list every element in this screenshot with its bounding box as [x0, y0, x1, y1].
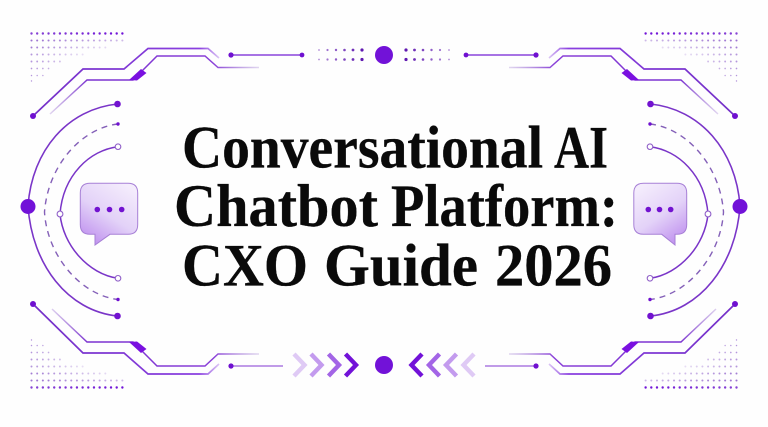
- concentric arcs: right: [647, 101, 748, 319]
- concentric arcs: left: [20, 101, 121, 319]
- icon: chat bubble left: [80, 183, 138, 245]
- title line 2: Chatbot: [174, 173, 378, 239]
- circuit traces: top left: [30, 48, 259, 119]
- dot matrix: bottom right: [644, 340, 736, 388]
- bottom centre connector with chevrons: [228, 354, 539, 376]
- circuit traces: bottom right: [509, 301, 738, 374]
- title line 1: Conversational: [182, 114, 543, 180]
- title line 3: 2026: [495, 232, 612, 298]
- title line 2: Platform:: [391, 173, 618, 239]
- top centre connector: [228, 46, 539, 64]
- title line 3: Guide: [324, 232, 478, 298]
- dot matrix: bottom left: [32, 340, 124, 388]
- title line 3: CXO: [182, 232, 308, 298]
- title: [174, 114, 618, 298]
- dot matrix: top right: [644, 34, 736, 81]
- circuit traces: bottom left: [30, 301, 259, 374]
- icon: chat bubble right: [634, 183, 687, 245]
- circuit traces: top right: [509, 48, 738, 119]
- title line 1: AI: [554, 114, 608, 180]
- dot matrix: top left: [32, 34, 124, 81]
